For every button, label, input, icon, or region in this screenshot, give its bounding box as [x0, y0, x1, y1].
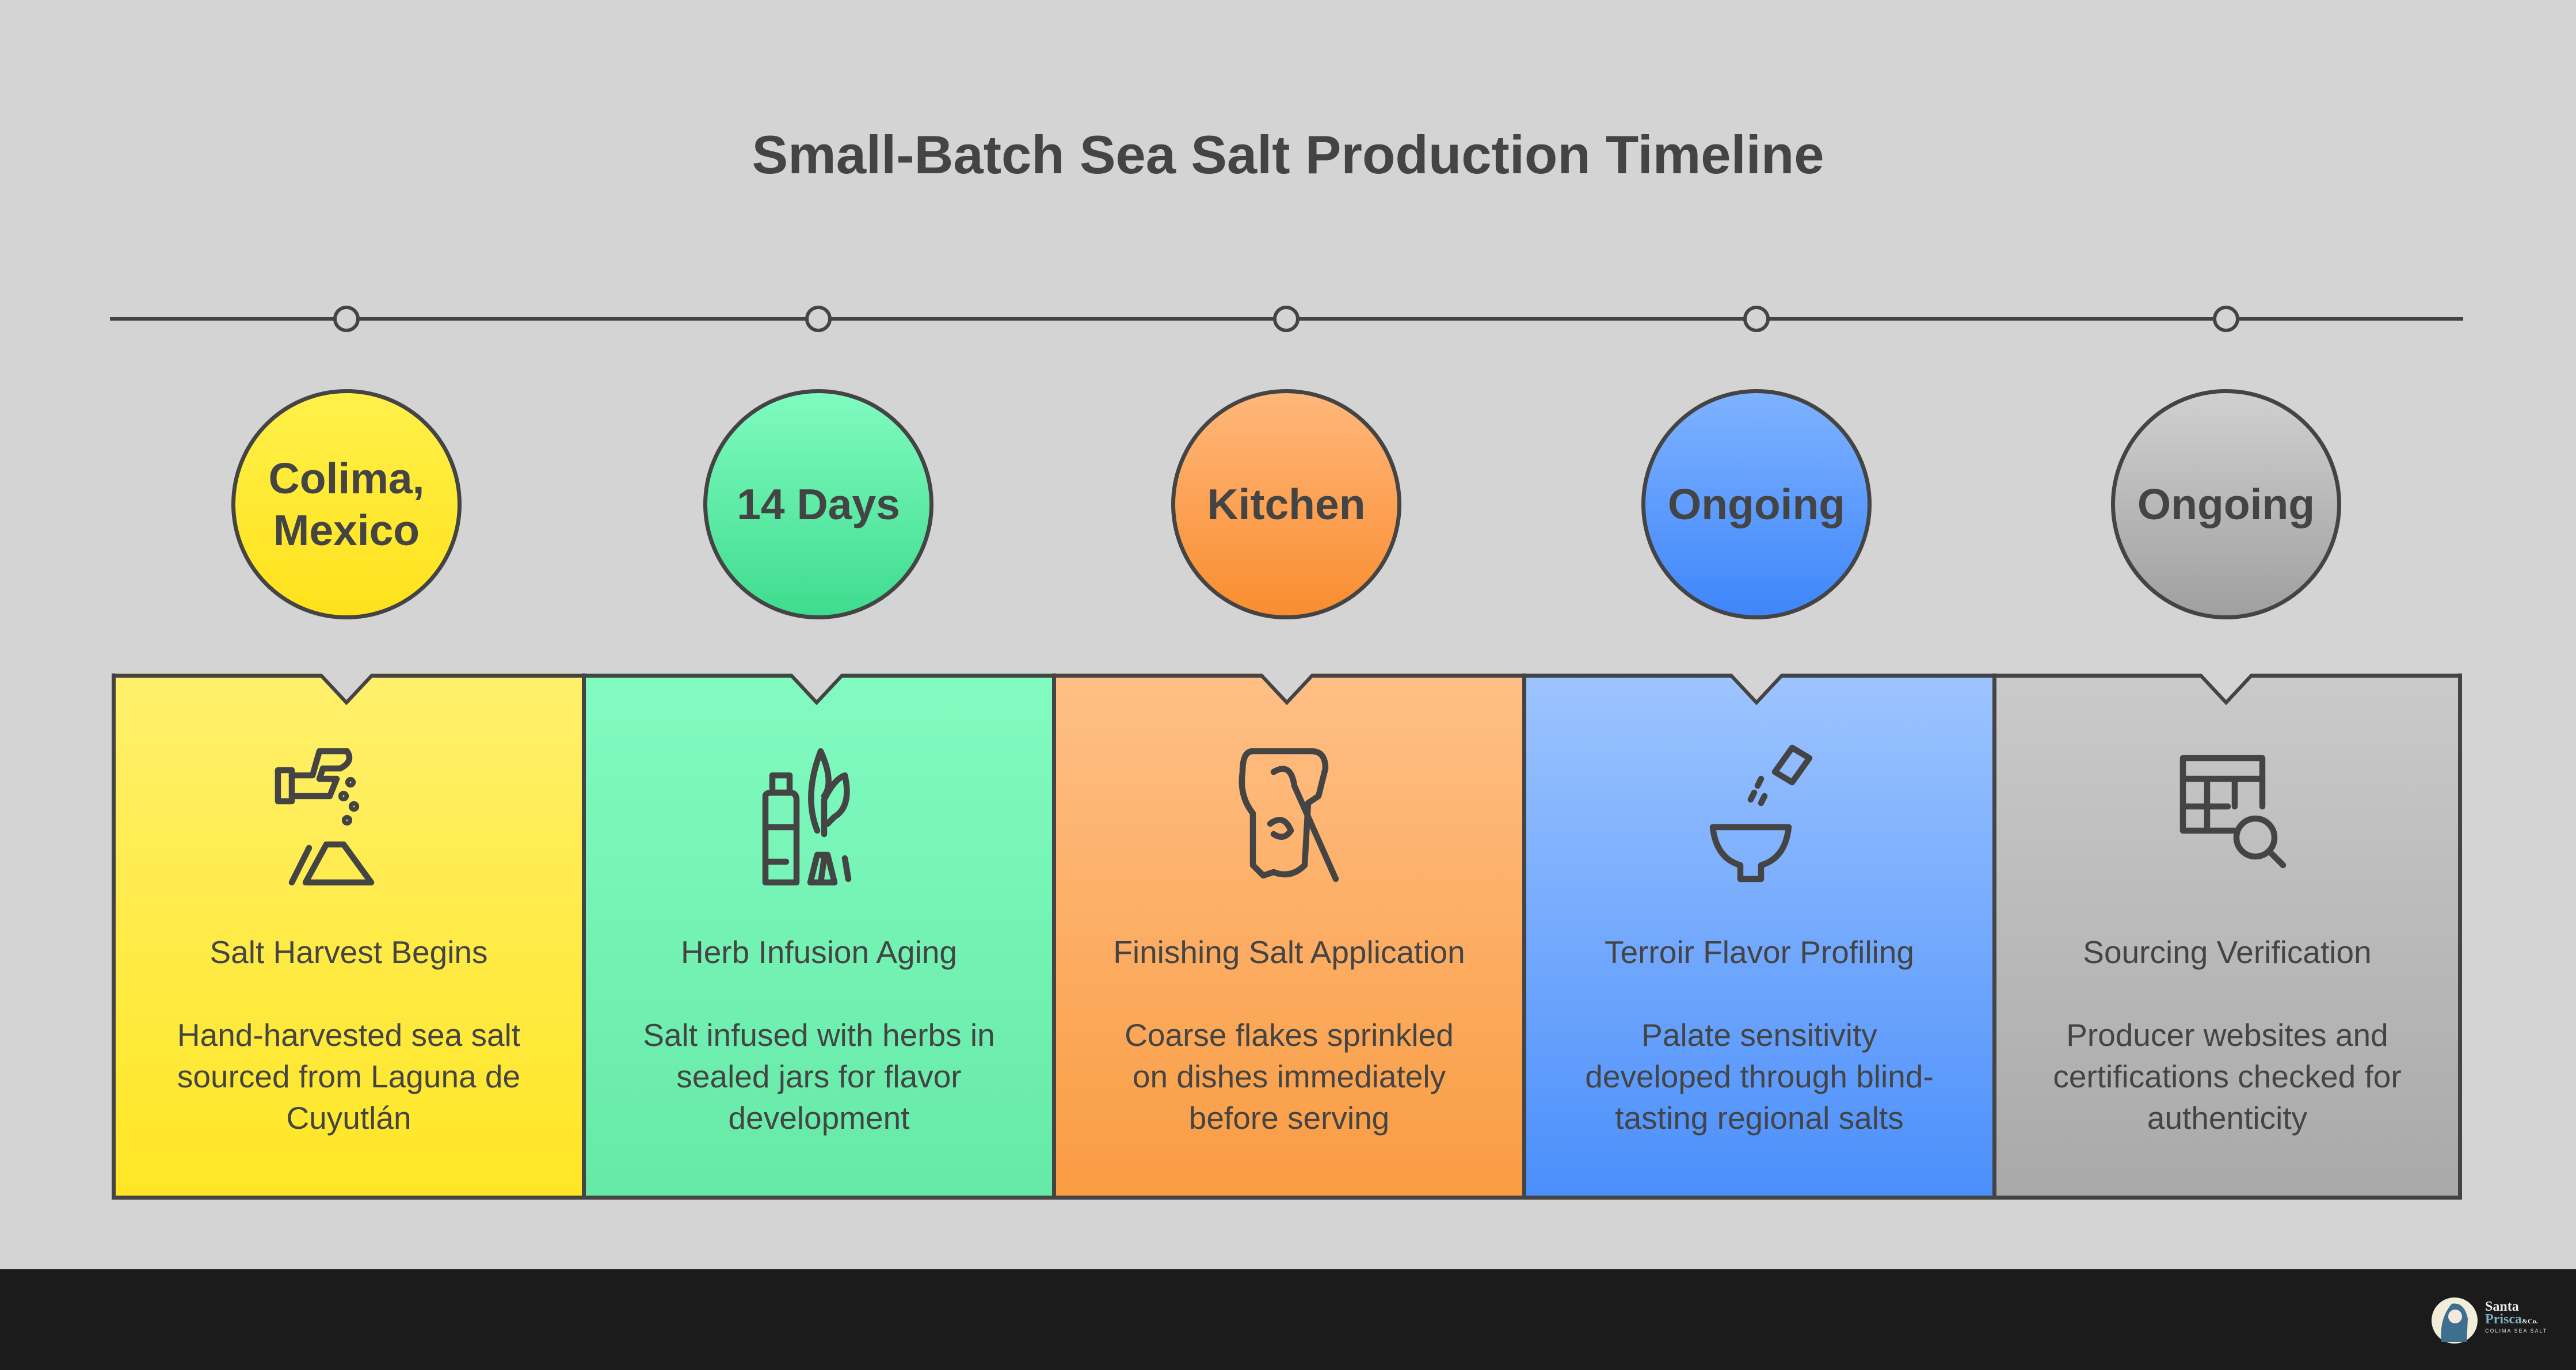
- logo: Prisca&Co.: [2485, 1312, 2538, 1327]
- top border with notches: [116, 673, 2458, 705]
- circle: Kitchen: [1171, 389, 1401, 619]
- icon: jar and herbs: [762, 748, 852, 885]
- description: sourced from Laguna de: [177, 1059, 520, 1094]
- circle: Kitchen: Kitchen: [1207, 480, 1366, 528]
- description: on dishes immediately: [1133, 1059, 1446, 1094]
- circle: Colima, Mexico: [231, 389, 462, 619]
- circle: Ongoing gray: [2111, 389, 2341, 619]
- description: Hand-harvested sea salt: [177, 1017, 520, 1053]
- description: [177, 1017, 520, 1136]
- heading: Herb Infusion Aging: [681, 934, 957, 970]
- card 4: [1522, 673, 1992, 1200]
- description: Producer websites and: [2066, 1017, 2388, 1053]
- description: Coarse flakes sprinkled: [1125, 1017, 1454, 1053]
- card 3: [1052, 673, 1522, 1200]
- description: [1585, 1017, 1934, 1136]
- description: [2053, 1017, 2402, 1136]
- timeline line: [110, 317, 2463, 321]
- heading: Salt Harvest Begins: [209, 934, 488, 970]
- card 1: [112, 673, 582, 1200]
- icon: bowl with salt: [1709, 745, 1813, 882]
- description: Cuyutlán: [286, 1100, 411, 1136]
- circle: Colima, Mexico: Mexico: [273, 506, 420, 554]
- logo: [2432, 1297, 2547, 1344]
- footer: [0, 1269, 2576, 1370]
- circle: Colima, Mexico: Colima,: [269, 454, 424, 503]
- circle: Ongoing gray: Ongoing: [2137, 480, 2315, 528]
- icon: chef hand finishing: [1239, 748, 1339, 882]
- description: before serving: [1189, 1100, 1389, 1136]
- circle: Ongoing: [1641, 389, 1872, 619]
- cards panel: [112, 673, 2462, 1200]
- heading: Terroir Flavor Profiling: [1605, 934, 1914, 970]
- icon: table with magnifier: [2180, 755, 2286, 868]
- circle: Ongoing: Ongoing: [1668, 480, 1845, 528]
- description: Salt infused with herbs in: [643, 1017, 995, 1053]
- timeline dots: [333, 306, 2239, 332]
- circle: 14 Days: 14 Days: [737, 480, 900, 528]
- title: Small-Batch Sea Salt Production Timeline: [752, 124, 1824, 185]
- description: authenticity: [2147, 1100, 2307, 1136]
- heading: Sourcing Verification: [2083, 934, 2372, 970]
- heading: Finishing Salt Application: [1113, 934, 1465, 970]
- description: development: [729, 1100, 909, 1136]
- logo: COLIMA SEA SALT: [2485, 1328, 2547, 1334]
- description: Palate sensitivity: [1641, 1017, 1877, 1053]
- description: [643, 1017, 995, 1136]
- description: tasting regional salts: [1615, 1100, 1904, 1136]
- description: certifications checked for: [2053, 1059, 2402, 1094]
- circle: 14 Days: [703, 389, 933, 619]
- description: developed through blind-: [1585, 1059, 1934, 1094]
- card 5: [1992, 673, 2462, 1200]
- logo: Santa: [2485, 1299, 2519, 1314]
- description: sealed jars for flavor: [676, 1059, 962, 1094]
- icon: hand sprinkling salt: [275, 748, 374, 885]
- card 2: [582, 673, 1052, 1200]
- description: [1125, 1017, 1454, 1136]
